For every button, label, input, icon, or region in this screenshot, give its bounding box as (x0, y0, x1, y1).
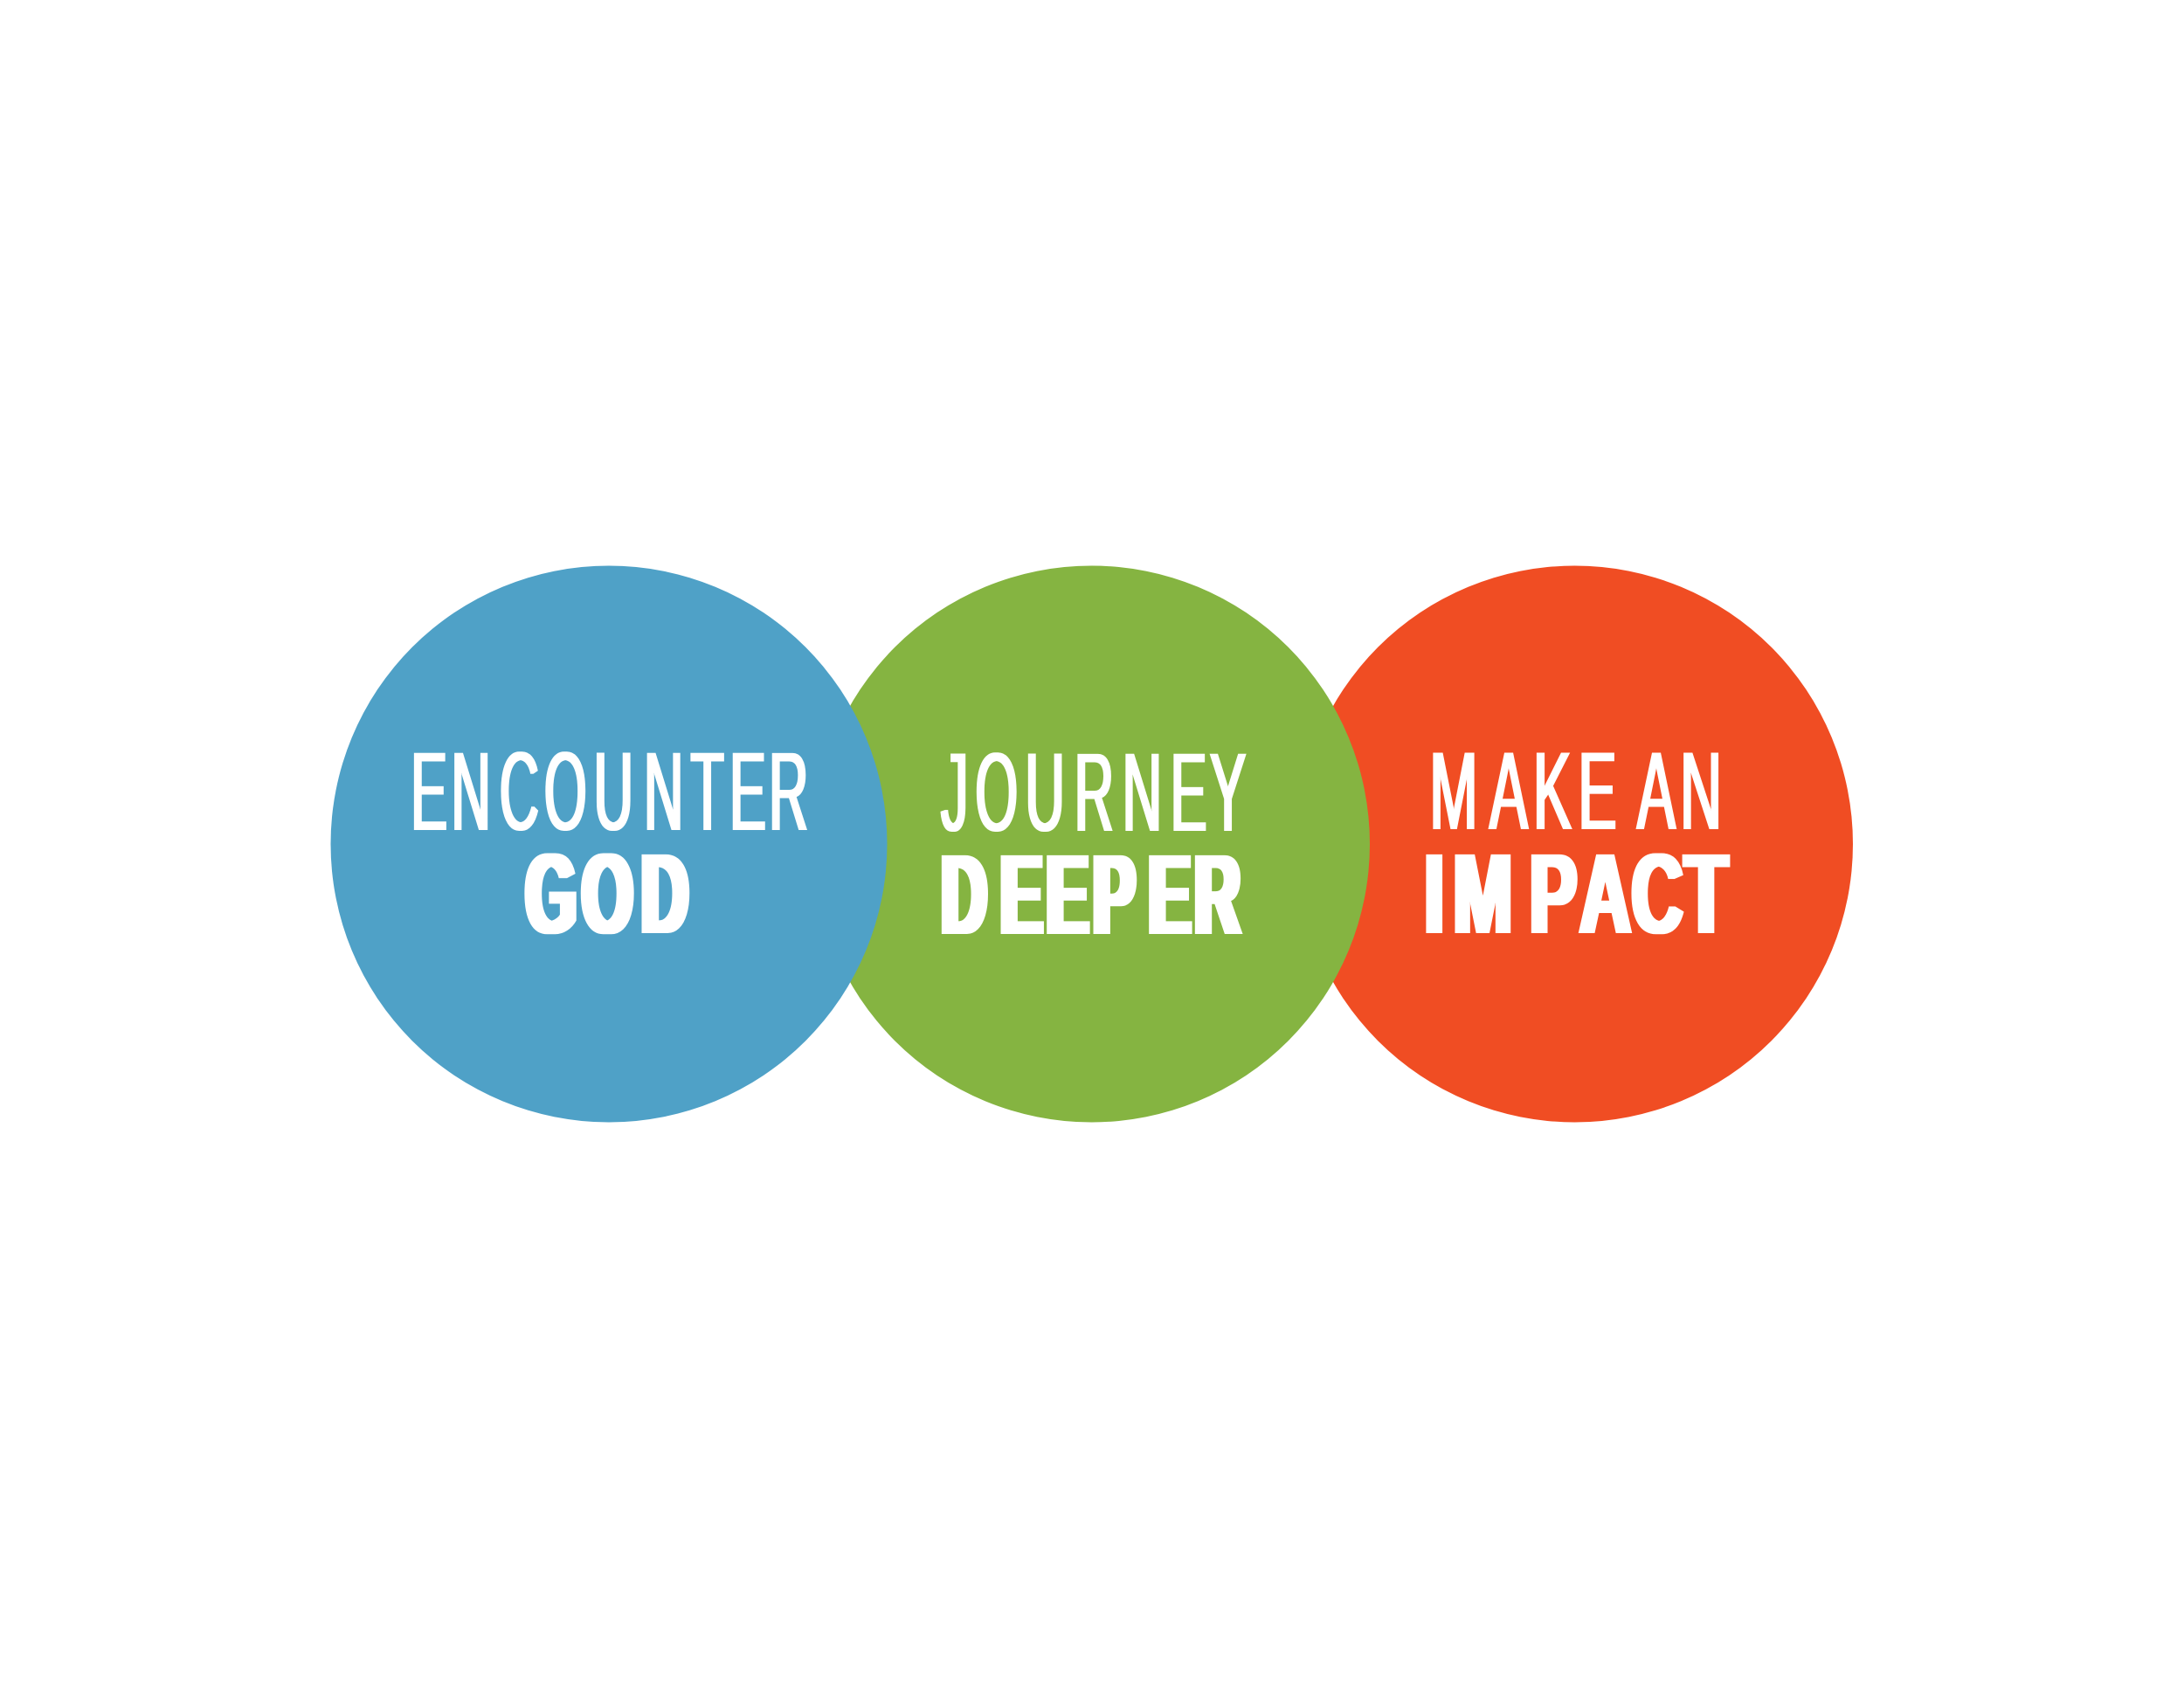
panel: green circle, journey deeper (813, 566, 1370, 1122)
text: encounter: ENCOUNTER (411, 730, 808, 854)
text: impact: IMPACT (1424, 830, 1728, 958)
text: make an: MAKE AN (1429, 730, 1722, 854)
panel: red circle, make an impact (1296, 566, 1853, 1122)
panel: blue circle, encounter god (330, 566, 888, 1122)
text: journey: JOURNEY (941, 731, 1247, 855)
text: god: GOD (526, 829, 688, 958)
text: deeper: DEEPER (942, 831, 1241, 959)
